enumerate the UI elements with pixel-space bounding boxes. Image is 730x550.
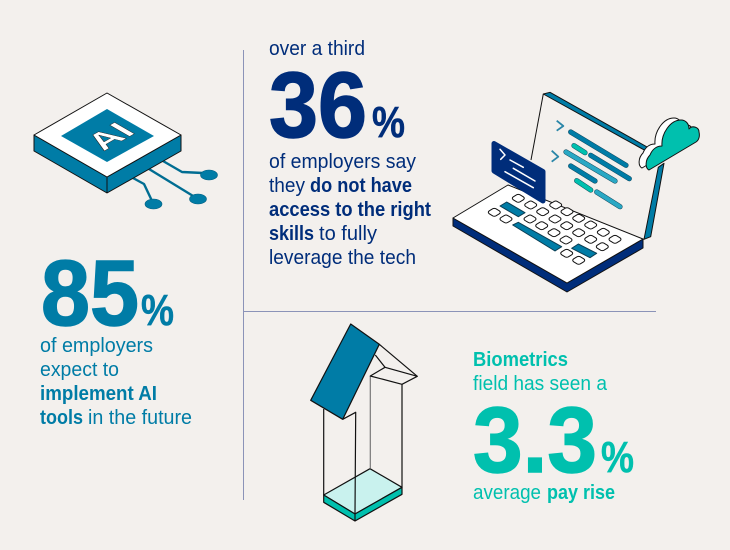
description: expect to (40, 359, 119, 381)
chip circuit nodes (145, 170, 218, 209)
cloud (639, 118, 699, 170)
number 85%: % (141, 286, 174, 335)
description: in the future (88, 407, 192, 429)
laptop base (453, 218, 643, 292)
stat: 3.3% pay rise (473, 349, 634, 504)
icon: rising arrow (311, 324, 417, 521)
description: implement AI (40, 383, 157, 405)
description: average (473, 482, 541, 504)
stat: 36% lack skills (269, 38, 431, 269)
description: of employers say (269, 151, 416, 173)
code prompts (552, 121, 563, 162)
description: they (269, 175, 305, 197)
chip centre (61, 109, 154, 162)
description: of employers (40, 335, 153, 357)
keyboard keys (488, 194, 621, 264)
icon: laptop with cloud (453, 92, 699, 292)
description: access to the right (269, 199, 431, 221)
description: pay rise (547, 482, 615, 504)
lead-in (473, 349, 608, 395)
lead-in: Biometrics (473, 349, 568, 371)
laptop screen (531, 94, 543, 160)
description: skills (269, 223, 314, 245)
number 3.3%: 3.3 (473, 388, 597, 492)
arrow outline (324, 344, 417, 514)
screen side edge (644, 163, 664, 239)
lead-in: over a third (269, 38, 365, 60)
number 36%: % (372, 98, 405, 147)
dark keys (500, 202, 597, 258)
description: do not have (310, 175, 412, 197)
chip body (34, 135, 181, 193)
stat: 85% of employers (40, 241, 192, 429)
number 36%: 36 (269, 53, 367, 157)
terminal window (494, 144, 543, 201)
description (269, 151, 431, 269)
description: leverage the tech (269, 247, 416, 269)
code lines on screen (566, 132, 629, 207)
screen top edge (543, 92, 651, 152)
description (473, 482, 615, 504)
description: tools (40, 407, 83, 429)
number 3.3%: % (601, 433, 634, 482)
arrow head panel (311, 324, 379, 419)
description (40, 335, 192, 429)
lead-in: field has seen a (473, 373, 608, 395)
description: to fully (319, 223, 377, 245)
number 85%: 85 (41, 241, 139, 345)
arrow base (324, 469, 402, 514)
icon: AI chip (34, 93, 218, 209)
chip circuit traces (133, 161, 203, 203)
chip AI label: AI (78, 118, 143, 155)
